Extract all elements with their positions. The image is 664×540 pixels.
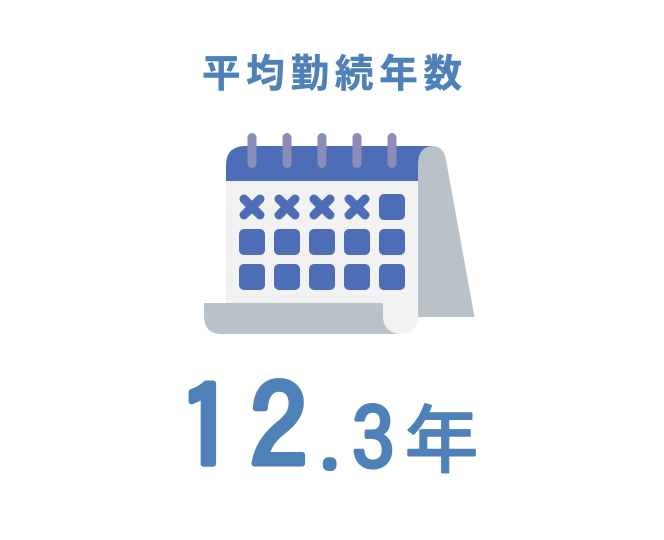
icon: desk calendar bbox=[204, 133, 474, 334]
calendar page bbox=[226, 181, 418, 334]
digit 3: 3 bbox=[352, 397, 394, 481]
title: 平均勤続年数 bbox=[202, 43, 462, 99]
remaining day squares bbox=[239, 194, 405, 290]
binder rings bbox=[248, 133, 396, 168]
calendar header bbox=[226, 146, 432, 181]
value: 12.3 years bbox=[178, 368, 478, 488]
decimal point: . bbox=[326, 448, 336, 468]
digit 2: 2 bbox=[250, 368, 308, 484]
digit 1: 1 bbox=[178, 368, 236, 484]
calendar back stand bbox=[418, 146, 474, 317]
crossed-off days bbox=[244, 199, 365, 215]
calendar bottom curl bbox=[204, 303, 398, 334]
unit: year: 年 bbox=[405, 382, 478, 488]
